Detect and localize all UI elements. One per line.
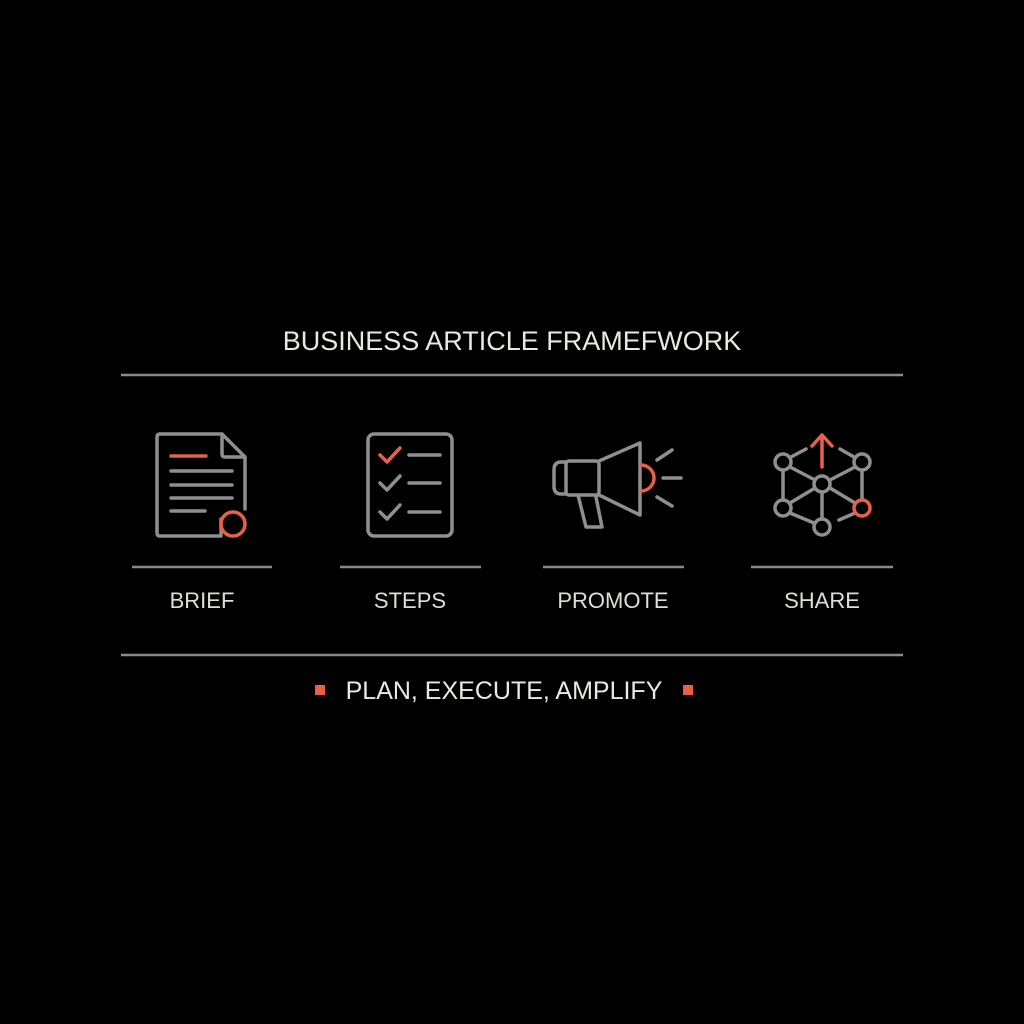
icon: brief document <box>157 434 245 536</box>
title: BUSINESS ARTICLE FRAMEFWORK <box>283 326 741 356</box>
tagline: PLAN, EXECUTE, AMPLIFY <box>346 677 663 705</box>
icon: steps checklist <box>368 434 452 536</box>
icon: promote megaphone <box>554 443 681 527</box>
icon: share network <box>775 435 870 535</box>
label: share: SHARE <box>784 588 860 613</box>
label: promote: PROMOTE <box>557 588 669 613</box>
label: steps: STEPS <box>374 588 446 613</box>
label: brief <box>132 567 272 613</box>
label: brief: BRIEF <box>170 588 234 613</box>
